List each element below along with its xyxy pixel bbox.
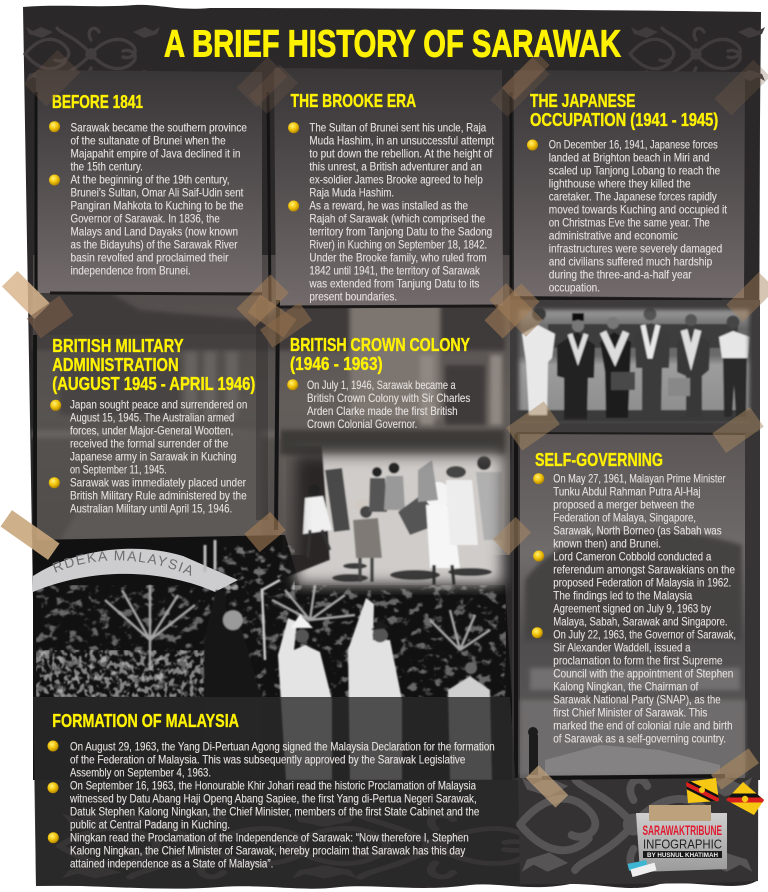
heading: the japanese occupation — [530, 91, 718, 130]
text block: the brooke era: Muda Hashim, in an unsuccessful attempt — [309, 134, 495, 148]
tape: blue — [628, 860, 648, 871]
text block: japanese occupation: infrastructures were severely damaged — [549, 241, 722, 255]
figure: woman waving — [204, 590, 262, 780]
text block: formation of malaysia: attained independence as a State of Malaysia”. — [70, 856, 273, 870]
bullet icon — [48, 832, 59, 843]
heading: british crown colony: (1946 - 1963) — [290, 354, 383, 374]
heading: before 1841: BEFORE 1841 — [52, 92, 143, 112]
text block: self-governing: Kalong Ningkan, the Chairman of — [553, 679, 699, 693]
text block: self-governing: Tunku Abdul Rahman Putra Al-Haj — [553, 484, 701, 498]
text block: self-governing: known then) and Brunei. — [553, 536, 661, 550]
text block: british military administration: British Military Rule administered by the — [70, 489, 247, 503]
text block: before 1841: of the sultanate of Brunei when the — [70, 134, 226, 148]
figure 1 — [522, 307, 555, 415]
text block: before 1841: Malays and Land Dayaks (now known — [70, 224, 238, 238]
text block: self-governing: The findings led to the Malaysia — [553, 588, 693, 602]
child with hat — [353, 499, 382, 582]
heading: self-governing: SELF-GOVERNING — [535, 450, 663, 470]
text block: before 1841: Brunei’s Sultan, Omar Ali Saif-Udin sent — [70, 186, 244, 200]
bullet icon — [48, 740, 58, 752]
ornament: top left — [25, 27, 160, 81]
figure: police officer — [448, 662, 492, 780]
foliage texture — [36, 585, 506, 697]
arch with banner — [33, 548, 238, 592]
text block: british military administration: on September 11, 1945. — [70, 463, 167, 477]
heading: formation of malaysia: FORMATION OF MALAYSIA — [52, 711, 239, 731]
figure 4 — [635, 308, 670, 418]
bullet icon — [49, 121, 60, 132]
figure 5 — [668, 314, 710, 417]
heading: british crown colony: BRITISH CROWN COLONY — [290, 335, 470, 355]
panel: top row backgrounds — [36, 68, 745, 307]
crowd texture — [36, 650, 211, 697]
text block: british military administration: Australian Military until April 15, 1946. — [70, 502, 232, 516]
bullet icon — [50, 400, 61, 411]
text block: self-governing — [553, 471, 736, 745]
tape: white — [630, 863, 657, 877]
text block: self-governing: Council with the appointment of Stephen — [553, 666, 733, 680]
text block: self-governing: Agreement signed on July 9, 1963 by — [553, 601, 711, 615]
bullet icon — [49, 174, 60, 186]
text block: japanese occupation: landed at Brighton beach in Miri and — [549, 150, 709, 164]
text block: before 1841: Majapahit empire of Java declined it in — [70, 146, 240, 160]
text block: before 1841: the 15th century. — [70, 160, 143, 174]
photo: officials with garlands — [510, 300, 760, 432]
text block: japanese occupation: lighthouse where they killed the — [549, 176, 691, 190]
panel: bottom right backdrop — [518, 777, 758, 884]
text block: before 1841: At the beginning of the 19th century, — [70, 172, 230, 186]
text block: self-governing: Sarawak, North Borneo (as Sabah was — [553, 523, 722, 537]
text block: self-governing: marked the end of colonial rule and birth — [553, 718, 733, 732]
text block: self-governing: referendum amongst Sarawakians on the — [553, 562, 735, 576]
text block: british military administration: Japan sought peace and surrendered on — [70, 398, 247, 412]
text block: formation of malaysia: Ningkan read the Proclamation of the Independence of Sarawak: “Now therefore I, Stephen — [70, 830, 469, 844]
text block: self-governing: Lord Cameron Cobbold conducted a — [553, 549, 712, 563]
text block: british military administration: Japanese army in Sarawak in Kuching — [70, 450, 236, 464]
ornament: top right — [630, 27, 765, 81]
text block: the brooke era: As a reward, he was installed as the — [309, 198, 468, 212]
heading: british military administration — [52, 336, 255, 394]
figure 3 — [600, 317, 635, 418]
text block: japanese occupation: moved towards Kuching and occupied it — [549, 202, 728, 216]
text block: british crown colony: Crown Colonial Governor. — [307, 417, 417, 431]
children centre — [368, 462, 430, 536]
figure 2 — [557, 313, 595, 420]
text block: british crown colony: On July 1, 1946, Sarawak became a — [307, 378, 456, 392]
text block: before 1841: basin revolted and proclaimed their — [70, 250, 228, 264]
tape on logo — [649, 805, 711, 821]
bullet icon — [287, 379, 298, 390]
text block: the brooke era: to put down the rebellion. At the height of — [309, 146, 493, 160]
text block: self-governing: Malaya, Sabah, Sarawak and Singapore. — [553, 614, 728, 628]
text block: self-governing: Sarawak National Party (SNAP), as the — [553, 692, 721, 706]
text block: british crown colony — [307, 378, 470, 431]
text block: self-governing: proclamation to form the first Supreme — [553, 653, 723, 667]
bullet icon — [533, 550, 544, 562]
heading: british military administration: BRITISH MILITARY — [52, 336, 184, 356]
text block: the brooke era: Under the Brooke family, who ruled from — [309, 250, 487, 264]
text block: japanese occupation: during the three-and-a-half year — [549, 267, 692, 281]
divider bar: self-governing bottom — [542, 776, 725, 778]
text block: formation of malaysia: On September 16, 1963, the Honourable Khir Johari read the historic Proclamation of Malaysia — [70, 778, 476, 792]
photo: parade ground backdrop — [512, 430, 760, 780]
bullet icon — [288, 200, 299, 212]
heading: british military administration: ADMINISTRATION — [52, 355, 179, 375]
text block: self-governing: of Sarawak as a self-governing country. — [553, 731, 726, 745]
text block: self-governing: proposed a merger between the — [553, 497, 695, 511]
text block: the brooke era: 1842 until 1941, the territory of Sarawak — [309, 264, 481, 278]
text block: before 1841: Pangiran Mahkota to Kuching to be the — [70, 198, 244, 212]
text block: self-governing: Federation of Malaya, Singapore, — [553, 510, 696, 524]
logo card — [628, 805, 727, 877]
bullet icon — [527, 140, 538, 150]
text block: british military administration: received the formal surrender of the — [70, 437, 229, 451]
figure 6 — [719, 316, 750, 417]
text block: british military administration: August 15, 1945. The Australian armed — [70, 411, 234, 425]
bullet icon — [288, 122, 299, 133]
bullet icon — [532, 627, 543, 638]
photo: formation of malaysia ceremony — [33, 535, 512, 780]
heading: the japanese occupation: OCCUPATION (1941 - 1945) — [530, 110, 718, 130]
bullet icon — [49, 477, 60, 488]
text block: british military administration: forces, under Major-General Wootten, — [70, 424, 233, 438]
text block: british military administration: Sarawak was immediately placed under — [70, 476, 246, 490]
heading: british crown colony — [290, 335, 470, 374]
heading: the brooke era: THE BROOKE ERA — [291, 91, 416, 111]
foliage texture — [215, 545, 295, 590]
text block: british crown colony: Arden Clarke made the first British — [307, 404, 458, 418]
text block: formation of malaysia — [69, 739, 495, 870]
title: A BRIEF HISTORY OF SARAWAK — [164, 24, 621, 66]
text block: formation of malaysia: of the Federation of Malaysia. This was subsequently approved by the Sarawak Legislative — [70, 752, 466, 766]
children right — [418, 456, 502, 585]
text block: the brooke era: territory from Tanjong Datu to the Sadong — [309, 224, 492, 238]
arch with banner: RDEKA MALAYSIA — [52, 550, 191, 576]
text block: formation of malaysia: Assembly on September 4, 1963. — [70, 765, 211, 779]
heading: the japanese occupation: THE JAPANESE — [530, 91, 635, 111]
text block: japanese occupation: scaled up Tanjong Lobang to reach the — [549, 163, 720, 177]
text block: japanese occupation — [549, 137, 728, 294]
text block: the brooke era: this unrest, a British adventurer and an — [309, 160, 482, 174]
text block: formation of malaysia: Kalong Ningkan, the Chief Minister of Sarawak, hereby proclaim that Sarawak has this day — [70, 843, 465, 857]
panel: self-governing — [516, 433, 745, 778]
text block: before 1841: Governor of Sarawak. In 1836, the — [70, 212, 220, 226]
ornament: faded motif — [60, 814, 357, 878]
text block: formation of malaysia: On August 29, 1963, the Yang Di-Pertuan Agong signed the Malaysia Declaration for the formation — [70, 739, 495, 753]
photo: colonial building backdrop — [33, 255, 510, 555]
panel: the japanese occupation — [527, 91, 728, 294]
icon: sarawak flag right — [726, 782, 764, 815]
text block: japanese occupation: occupation. — [549, 280, 600, 294]
text block: british military administration — [70, 398, 247, 516]
text block: the brooke era: Raja Muda Hashim. — [309, 186, 394, 200]
text block: the brooke era: Rajah of Sarawak (which comprised the — [309, 212, 486, 226]
ornament: faded motif — [290, 814, 587, 878]
text block: formation of malaysia: public at Central Padang in Kuching. — [70, 817, 230, 831]
text block: japanese occupation: on Christmas Eve the same year. The — [549, 215, 710, 229]
text block: the brooke era — [309, 120, 495, 304]
text block: the brooke era: ex-soldier James Brooke agreed to help — [309, 172, 483, 186]
text block: the brooke era: River) in Kuching on September 18, 1842. — [309, 238, 487, 252]
text block: the brooke era: present boundaries. — [309, 290, 397, 304]
palm foliage — [105, 540, 490, 670]
panel: formation of malaysia — [33, 697, 587, 886]
photo: children crowd — [280, 440, 512, 595]
panel: before 1841 — [49, 92, 247, 278]
text block: japanese occupation: administrative and economic — [549, 228, 678, 242]
text block: before 1841: as the Bidayuhs) of the Sarawak River — [70, 238, 238, 252]
byline bar: BY HUSNUL KHATIMAH — [647, 853, 718, 859]
text block: self-governing: first Chief Minister of Sarawak. This — [553, 705, 707, 719]
text block: british crown colony: British Crown Colony with Sir Charles — [307, 391, 470, 405]
bullet icon — [48, 782, 58, 793]
bullet icon — [533, 473, 544, 484]
text block: the brooke era: was extended from Tanjung Datu to its — [309, 276, 479, 290]
text block: japanese occupation: and civilians suffered much hardship — [549, 254, 713, 268]
text block: the brooke era: The Sultan of Brunei sent his uncle, Raja — [309, 120, 486, 134]
text block: before 1841: independence from Brunei. — [70, 264, 191, 278]
ornament: bottom right — [520, 777, 752, 872]
text block: before 1841 — [70, 120, 247, 278]
panel: british crown colony — [287, 335, 470, 431]
text block: self-governing: proposed Federation of Malaysia in 1962. — [553, 575, 731, 589]
text block: formation of malaysia: witnessed by Datu Abang Haji Openg Abang Sapiee, the first Yang di-Pertua Negeri Sarawak, — [69, 791, 477, 805]
icon: sarawak flag left — [686, 778, 719, 803]
panel: british military administration — [35, 300, 278, 542]
heading: british military administration: (AUGUST 1945 - APRIL 1946) — [52, 374, 255, 394]
text block: before 1841: Sarawak became the southern province — [70, 120, 247, 134]
text block: formation of malaysia: Datuk Stephen Kalong Ningkan, the Chief Minister, members of the first State Cabinet and the — [70, 804, 480, 818]
panel: the brooke era — [288, 91, 495, 304]
text block: self-governing: Sir Alexander Waddell, issued a — [553, 640, 691, 654]
figure: man in white — [278, 614, 332, 780]
text block: japanese occupation: On December 16, 1941, Japanese forces — [549, 137, 718, 151]
child in white dress — [303, 484, 332, 558]
logo: infographic: INFOGRAPHIC — [643, 838, 722, 852]
figure: man in white saluting — [348, 598, 402, 780]
adult with stick — [325, 468, 350, 532]
text block: japanese occupation: caretaker. The Japanese forces rapidly — [549, 189, 717, 203]
